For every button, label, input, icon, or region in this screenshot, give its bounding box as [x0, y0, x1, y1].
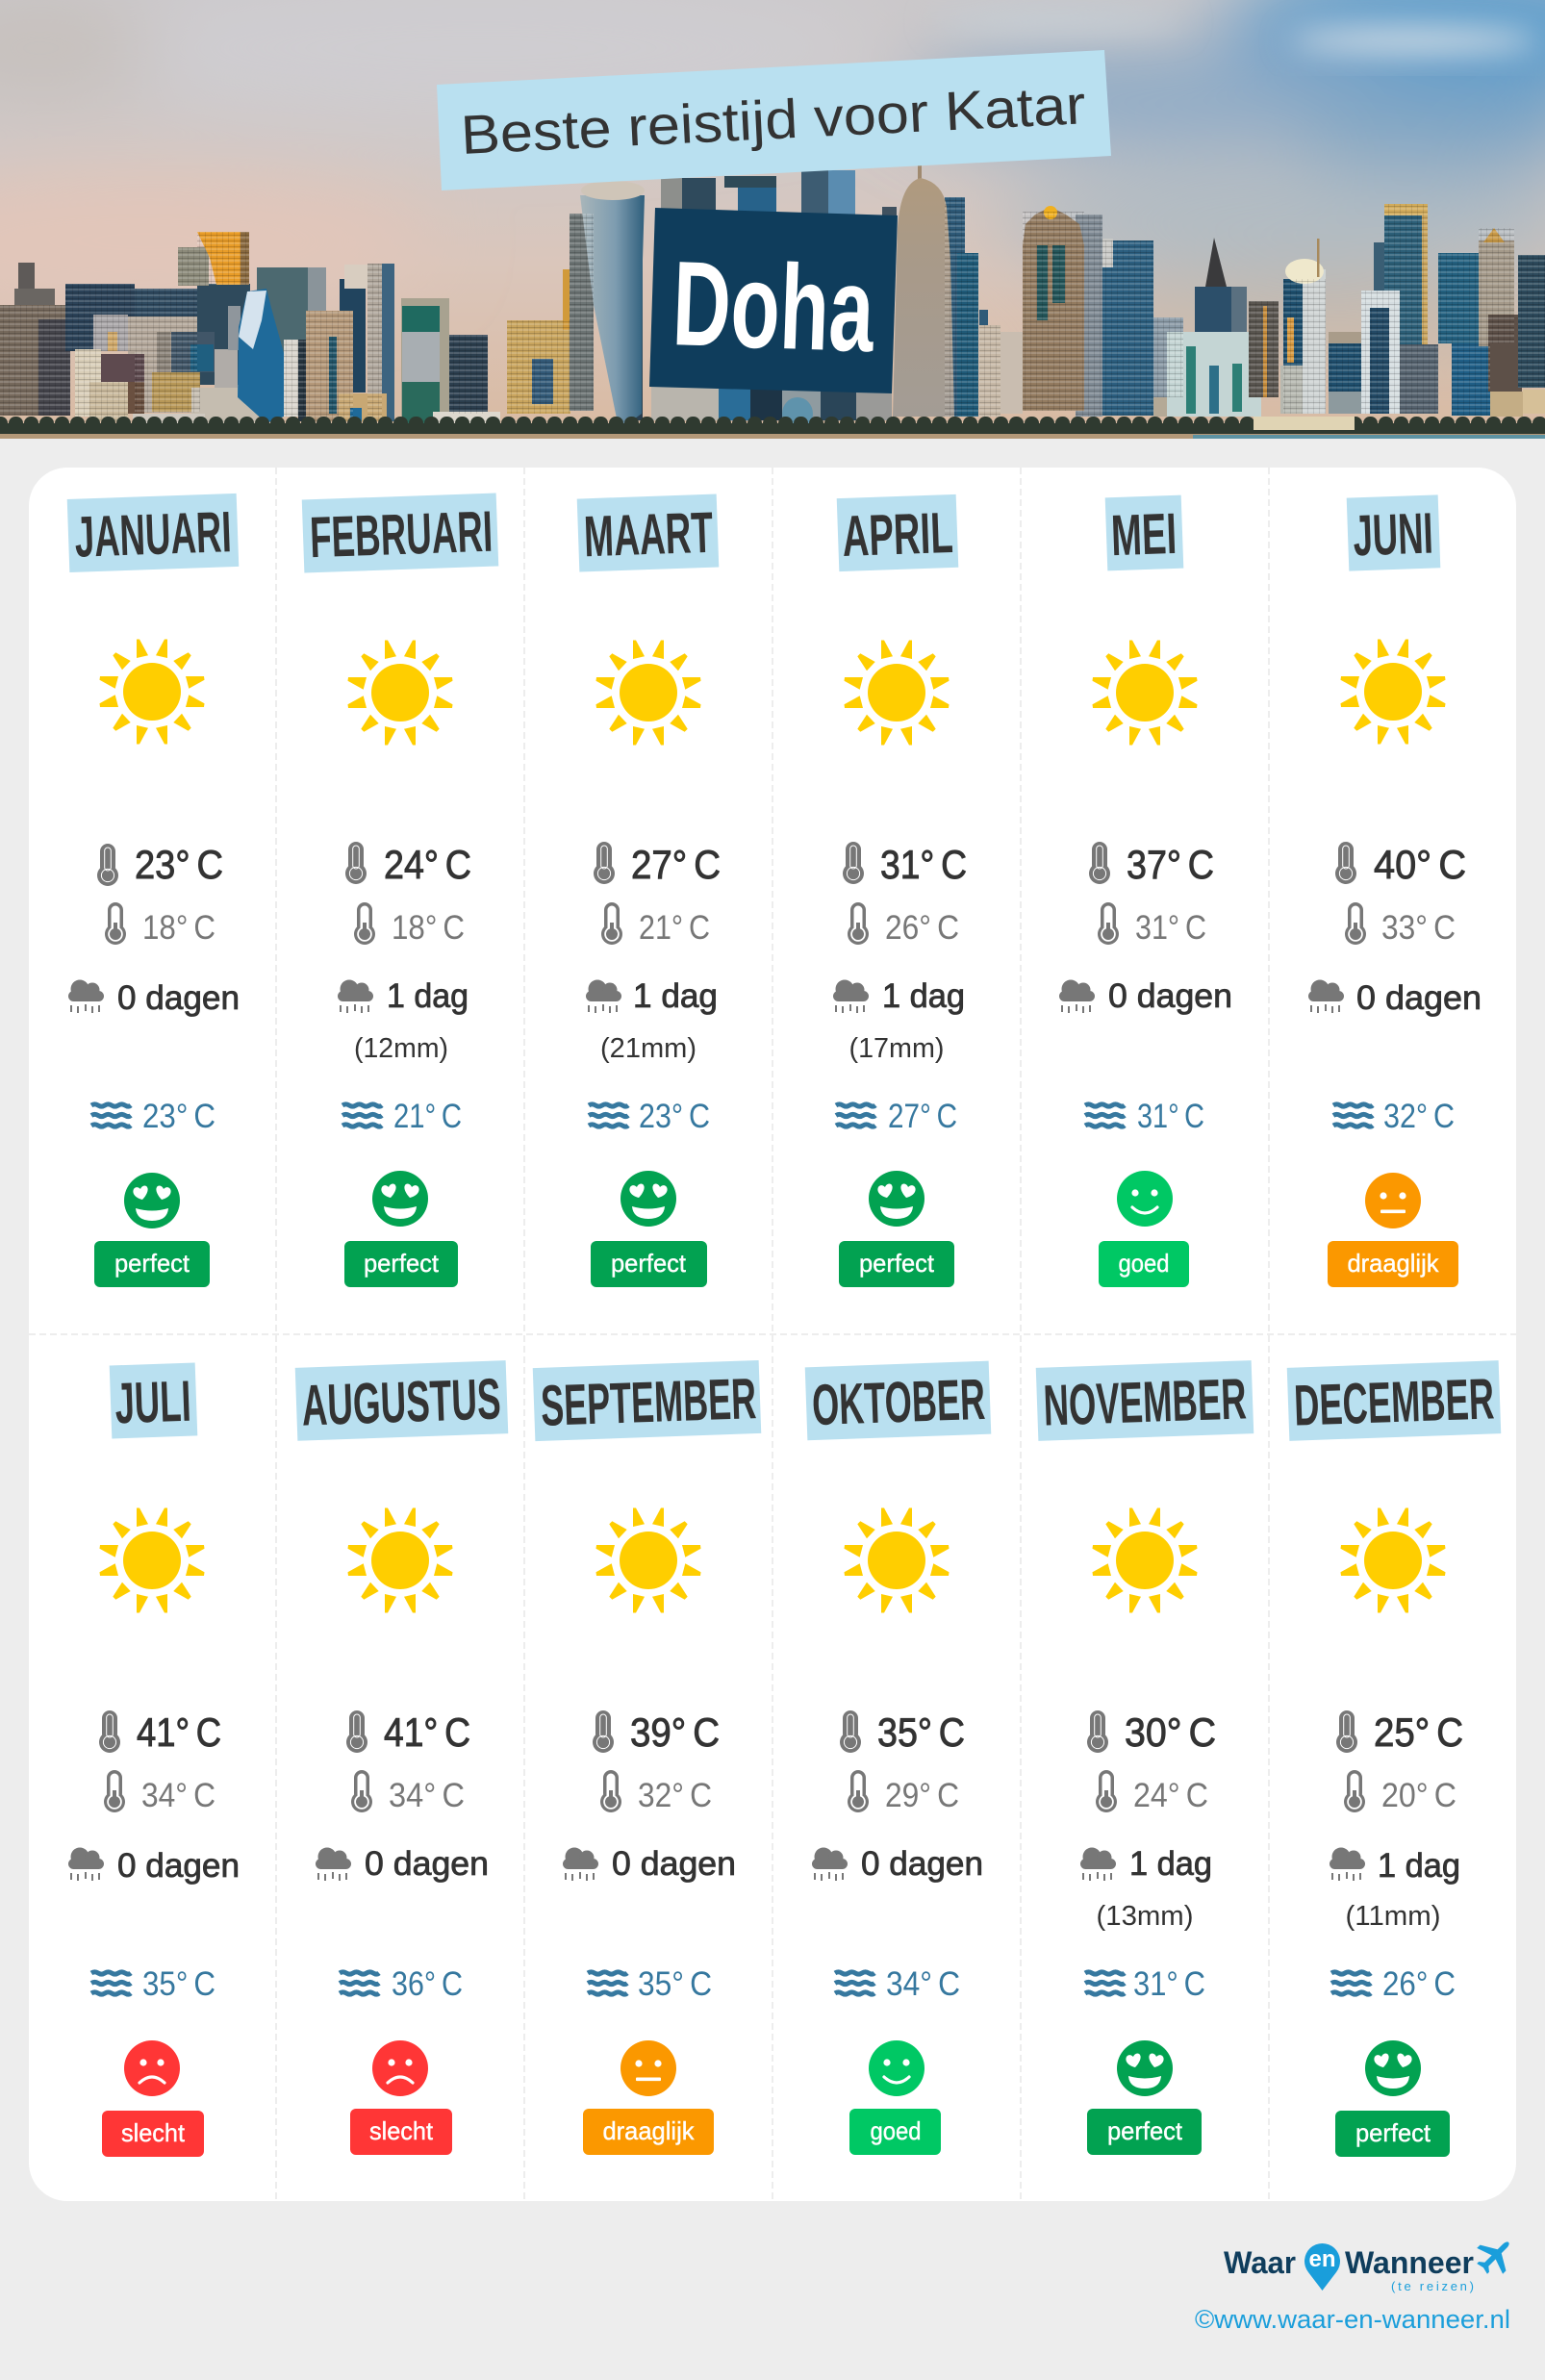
- rating badge: [1087, 2109, 1202, 2155]
- rating smiley: [124, 2040, 180, 2096]
- rating badge: [1099, 1241, 1189, 1287]
- month heading: SEPTEMBER: [540, 1366, 757, 1438]
- rating badge: perfect: [114, 1249, 190, 1278]
- sea temperature: 26° C: [1382, 1965, 1456, 2003]
- min temperature: 33° C: [1381, 909, 1456, 947]
- rain amount: (13mm): [1097, 1901, 1193, 1932]
- sea temperature: 35° C: [142, 1965, 215, 2003]
- month heading: JUNI: [1352, 501, 1434, 568]
- month heading: MAART: [583, 500, 714, 569]
- icon: sun: [100, 1508, 204, 1612]
- month heading: [302, 493, 498, 573]
- sea temperature: [836, 1098, 957, 1135]
- sea temperature: [1331, 1965, 1456, 2003]
- min temperature: [848, 1770, 959, 1814]
- max temperature: 39° C: [630, 1709, 720, 1755]
- month heading: [837, 494, 958, 571]
- column: december: [1287, 1360, 1501, 2157]
- min temperature: 34° C: [141, 1777, 215, 1814]
- sea temperature: [91, 1098, 215, 1135]
- rain days: 0 dagen: [861, 1845, 983, 1883]
- rating smiley: [372, 1171, 428, 1227]
- rating badge: goed: [870, 2116, 922, 2145]
- icon: sun: [1341, 639, 1445, 745]
- rating badge: goed: [1118, 1249, 1170, 1278]
- month heading: [1347, 494, 1440, 571]
- rating smiley: [124, 1173, 180, 1228]
- column: november: [1036, 1360, 1254, 2155]
- towers centre cluster: [507, 165, 1000, 430]
- rating smiley: [1117, 1171, 1173, 1227]
- rain days: 1 dag: [1378, 1847, 1460, 1885]
- icon: airplane: [1469, 2229, 1522, 2282]
- month heading: [805, 1361, 991, 1440]
- rain days: [338, 977, 469, 1015]
- header photo: Doha skyline: [0, 0, 1545, 439]
- title banner: Beste reistijd voor Katar: Beste reistijd voor Katar: [460, 74, 1087, 166]
- sea temperature: [588, 1965, 712, 2003]
- month heading: JANUARI: [73, 499, 233, 570]
- max temperature: 41° C: [384, 1709, 470, 1755]
- rating badge: slecht: [369, 2116, 434, 2145]
- rating badge: [591, 1241, 707, 1287]
- min temperature: [105, 902, 215, 947]
- max temperature: 40° C: [1374, 842, 1466, 887]
- max temperature: [346, 1709, 470, 1755]
- column: juni: [1308, 494, 1482, 1287]
- month heading: [1036, 1360, 1254, 1441]
- min temperature: [1096, 1770, 1208, 1814]
- max temperature: [1087, 1709, 1216, 1755]
- column: februari: [302, 493, 498, 1287]
- min temperature: [848, 902, 959, 947]
- rating badge: [839, 1241, 954, 1287]
- rating badge: perfect: [364, 1249, 440, 1278]
- min temperature: 18° C: [142, 909, 215, 947]
- icon: sun: [348, 1508, 452, 1612]
- column: augustus: [295, 1360, 508, 2155]
- min temperature: [600, 1770, 712, 1814]
- website url: ©www.waar-en-wanneer.nl: [1195, 2305, 1510, 2334]
- max temperature: 30° C: [1125, 1709, 1216, 1755]
- rain days: 0 dagen: [612, 1845, 736, 1883]
- max temperature: 25° C: [1374, 1709, 1463, 1755]
- max temperature: [1089, 842, 1214, 887]
- month heading: AUGUSTUS: [300, 1366, 502, 1438]
- rating badge: [1328, 1241, 1458, 1287]
- month heading: JULI: [114, 1369, 192, 1435]
- max temperature: [1335, 842, 1466, 887]
- max temperature: [840, 1709, 965, 1755]
- rain days: 0 dagen: [1356, 979, 1482, 1017]
- rating smiley: [869, 1171, 924, 1227]
- waterfront: [0, 417, 1545, 439]
- sea temperature: 21° C: [393, 1098, 462, 1135]
- towers left cluster: [0, 232, 500, 428]
- icon: sun: [845, 1508, 949, 1612]
- min temperature: [104, 1770, 215, 1814]
- rain amount: (11mm): [1345, 1901, 1441, 1932]
- month heading: [295, 1360, 508, 1441]
- max temperature: 27° C: [631, 842, 721, 887]
- column: oktober: [805, 1361, 991, 2155]
- max temperature: [99, 1709, 221, 1755]
- sea temperature: [589, 1098, 710, 1135]
- sea temperature: 23° C: [639, 1098, 710, 1135]
- towers right cluster: [0, 197, 1545, 421]
- rating smiley: [372, 2040, 428, 2096]
- rain days: [1080, 1845, 1212, 1883]
- month heading: [533, 1360, 761, 1441]
- month heading: APRIL: [841, 500, 954, 569]
- rating smiley: [621, 1171, 676, 1227]
- rain days: 0 dagen: [1108, 977, 1232, 1015]
- month heading: OKTOBER: [811, 1367, 986, 1437]
- column: mei: [1059, 495, 1232, 1287]
- column: juli: [68, 1362, 240, 2157]
- min temperature: 31° C: [1135, 909, 1206, 947]
- rating smiley: [1117, 2040, 1173, 2096]
- rating badge: [94, 1241, 210, 1287]
- column: maart: [577, 494, 721, 1287]
- rain days: [833, 977, 965, 1015]
- rain amount: (17mm): [848, 1033, 945, 1064]
- rating badge: [1335, 2111, 1450, 2157]
- icon: sun: [596, 641, 700, 745]
- sea temperature: [91, 1965, 215, 2003]
- icon: sun: [1093, 1508, 1197, 1612]
- min temperature: [1345, 902, 1456, 947]
- rain days: [586, 977, 718, 1015]
- rating badge: [102, 2111, 204, 2157]
- rating badge: draaglijk: [602, 2116, 695, 2145]
- min temperature: 34° C: [389, 1777, 465, 1814]
- sea temperature: 32° C: [1383, 1098, 1455, 1135]
- max temperature: 23° C: [135, 842, 223, 887]
- rain days: 0 dagen: [117, 979, 240, 1017]
- rain amount: (12mm): [354, 1033, 448, 1064]
- icon: sun: [1093, 641, 1197, 745]
- icon: map pin: [1304, 2243, 1340, 2291]
- rain days: [1330, 1847, 1460, 1885]
- logo: Waar en Wanneer: Wanneer: [1345, 2245, 1474, 2280]
- max temperature: [345, 842, 471, 887]
- rating badge: perfect: [859, 1249, 935, 1278]
- rating badge: [849, 2109, 941, 2155]
- sea temperature: [340, 1965, 463, 2003]
- month heading: [67, 494, 239, 572]
- rating badge: [583, 2109, 714, 2155]
- panel: climate table card: [29, 468, 1516, 2201]
- month heading: NOVEMBER: [1042, 1366, 1248, 1438]
- min temperature: 29° C: [885, 1777, 959, 1814]
- min temperature: [351, 1770, 465, 1814]
- min temperature: [354, 902, 465, 947]
- city label: Doha: [649, 208, 898, 393]
- icon: sun: [1341, 1508, 1445, 1612]
- min temperature: 18° C: [392, 909, 465, 947]
- sea temperature: [1085, 1965, 1205, 2003]
- min temperature: [1098, 902, 1206, 947]
- sea temperature: 31° C: [1137, 1098, 1204, 1135]
- rating badge: perfect: [1355, 2118, 1431, 2147]
- sea temperature: 31° C: [1133, 1965, 1205, 2003]
- max temperature: 41° C: [137, 1709, 221, 1755]
- sea temperature: 35° C: [638, 1965, 712, 2003]
- rating badge: perfect: [611, 1249, 687, 1278]
- max temperature: [594, 842, 721, 887]
- icon: sun: [596, 1508, 700, 1612]
- min temperature: 32° C: [638, 1777, 712, 1814]
- title banner: Beste reistijd voor Katar: [437, 50, 1111, 190]
- max temperature: [1336, 1709, 1463, 1755]
- rating badge: slecht: [121, 2118, 186, 2147]
- icon: sun: [100, 639, 204, 745]
- sea temperature: 34° C: [886, 1965, 960, 2003]
- rating badge: [344, 1241, 458, 1287]
- column: januari: [67, 494, 240, 1287]
- rating smiley: [621, 2040, 676, 2096]
- icon: map pin: en: [1308, 2246, 1336, 2272]
- month heading: FEBRUARI: [309, 499, 494, 570]
- max temperature: 24° C: [384, 842, 471, 887]
- max temperature: 31° C: [880, 842, 967, 887]
- rating badge: draaglijk: [1347, 1249, 1439, 1278]
- min temperature: [601, 902, 710, 947]
- table dividers: [29, 468, 1516, 2201]
- month heading: [1105, 495, 1183, 570]
- sea temperature: 23° C: [142, 1098, 215, 1135]
- logo: Waar en Wanneer: [1224, 2229, 1522, 2293]
- month heading: [110, 1362, 197, 1439]
- rating smiley: [1365, 2040, 1421, 2096]
- rain days: 0 dagen: [365, 1845, 489, 1883]
- min temperature: [1344, 1770, 1456, 1814]
- sea temperature: [1085, 1098, 1204, 1135]
- sea temperature: [835, 1965, 960, 2003]
- column: april: [833, 494, 967, 1287]
- rain days: 1 dag: [387, 977, 469, 1015]
- rain days: 1 dag: [633, 977, 718, 1015]
- min temperature: 21° C: [639, 909, 710, 947]
- rating smiley: [869, 2040, 924, 2096]
- month heading: MEI: [1110, 501, 1178, 568]
- column: september: [533, 1360, 761, 2155]
- min temperature: 24° C: [1133, 1777, 1208, 1814]
- rain days: 1 dag: [1129, 1845, 1212, 1883]
- sea temperature: 36° C: [392, 1965, 463, 2003]
- max temperature: 37° C: [1127, 842, 1214, 887]
- rain days: 1 dag: [882, 977, 965, 1015]
- max temperature: 35° C: [877, 1709, 965, 1755]
- rain amount: (21mm): [600, 1033, 697, 1064]
- city label: Doha: Doha: [671, 237, 877, 377]
- sea temperature: 27° C: [888, 1098, 957, 1135]
- sea temperature: [1333, 1098, 1455, 1135]
- rating smiley: [1365, 1173, 1421, 1228]
- max temperature: [843, 842, 967, 887]
- rain days: 0 dagen: [117, 1847, 240, 1885]
- logo: Waar en Wanneer: Waar: [1224, 2245, 1296, 2280]
- min temperature: 20° C: [1381, 1777, 1456, 1814]
- icon: sun: [845, 641, 949, 745]
- rating badge: perfect: [1107, 2116, 1183, 2145]
- max temperature: [97, 842, 223, 887]
- max temperature: [593, 1709, 720, 1755]
- logo: Waar en Wanneer: (te reizen): [1391, 2279, 1474, 2293]
- icon: sun: [348, 641, 452, 745]
- month heading: [577, 494, 719, 572]
- rating badge: [350, 2109, 452, 2155]
- min temperature: 26° C: [885, 909, 959, 947]
- sea temperature: [342, 1098, 462, 1135]
